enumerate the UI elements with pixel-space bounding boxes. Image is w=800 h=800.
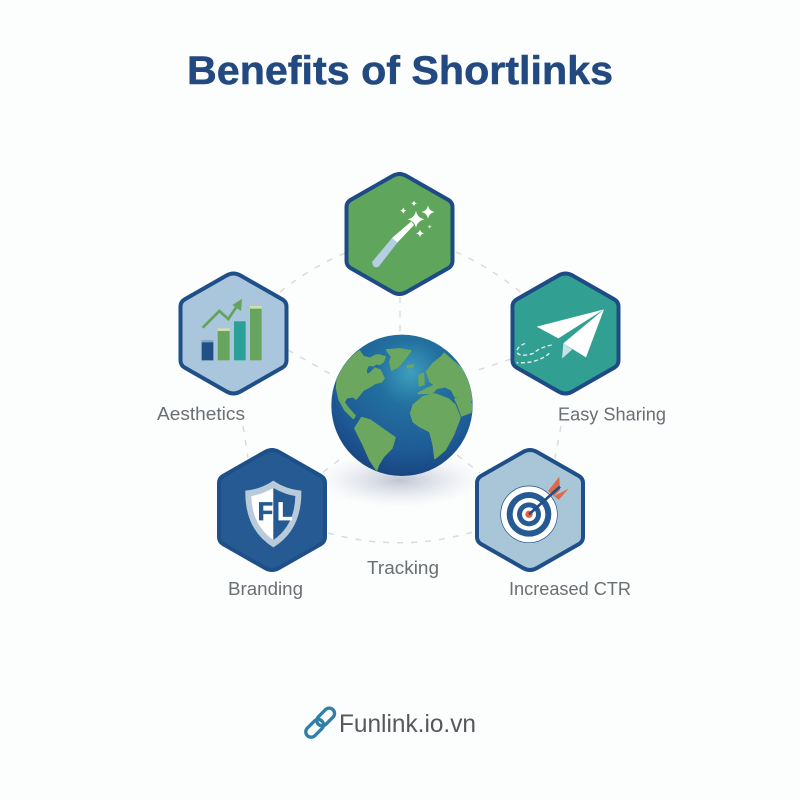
globe shadow bbox=[318, 453, 482, 507]
greenland bbox=[387, 349, 411, 370]
label: easy sharing: Easy Sharing bbox=[558, 404, 666, 424]
north america bbox=[337, 351, 385, 418]
label: tracking: Tracking bbox=[367, 558, 439, 578]
panel: easy sharing hexagon bbox=[512, 274, 618, 394]
icon: chain link bbox=[304, 706, 337, 739]
hexagon bbox=[219, 450, 325, 570]
panel: increased CTR hexagon bbox=[477, 450, 583, 570]
panel: branding hexagon bbox=[219, 450, 325, 570]
title: Benefits of Shortlinks bbox=[187, 49, 613, 93]
iceland bbox=[407, 365, 413, 368]
globe bbox=[331, 335, 473, 476]
icon: paper plane bbox=[517, 309, 604, 363]
hexagon bbox=[477, 450, 583, 570]
footer logo bbox=[304, 706, 476, 739]
panel: aesthetics hexagon bbox=[180, 274, 286, 394]
iberia and europe bbox=[418, 353, 473, 403]
label: increased CTR: Increased CTR bbox=[509, 579, 631, 599]
shield letters: FL bbox=[258, 498, 293, 526]
infographic bbox=[157, 54, 665, 739]
hexagon bbox=[512, 274, 618, 394]
label: branding: Branding bbox=[228, 579, 303, 599]
south america bbox=[355, 418, 395, 470]
africa bbox=[411, 394, 460, 458]
hexagon bbox=[180, 274, 286, 394]
brand name: Funlink.io.vn bbox=[339, 710, 476, 738]
label: aesthetics: Aesthetics bbox=[157, 404, 245, 424]
british isles bbox=[419, 373, 424, 386]
icon: magic wand bbox=[372, 200, 435, 267]
icon: bar chart with arrow bbox=[202, 299, 262, 360]
dashed connector ring bbox=[243, 252, 561, 543]
panel: magic wand hexagon bbox=[346, 174, 452, 294]
hexagon bbox=[346, 174, 452, 294]
icon: target with arrow bbox=[501, 477, 569, 543]
arabia bbox=[455, 397, 473, 416]
